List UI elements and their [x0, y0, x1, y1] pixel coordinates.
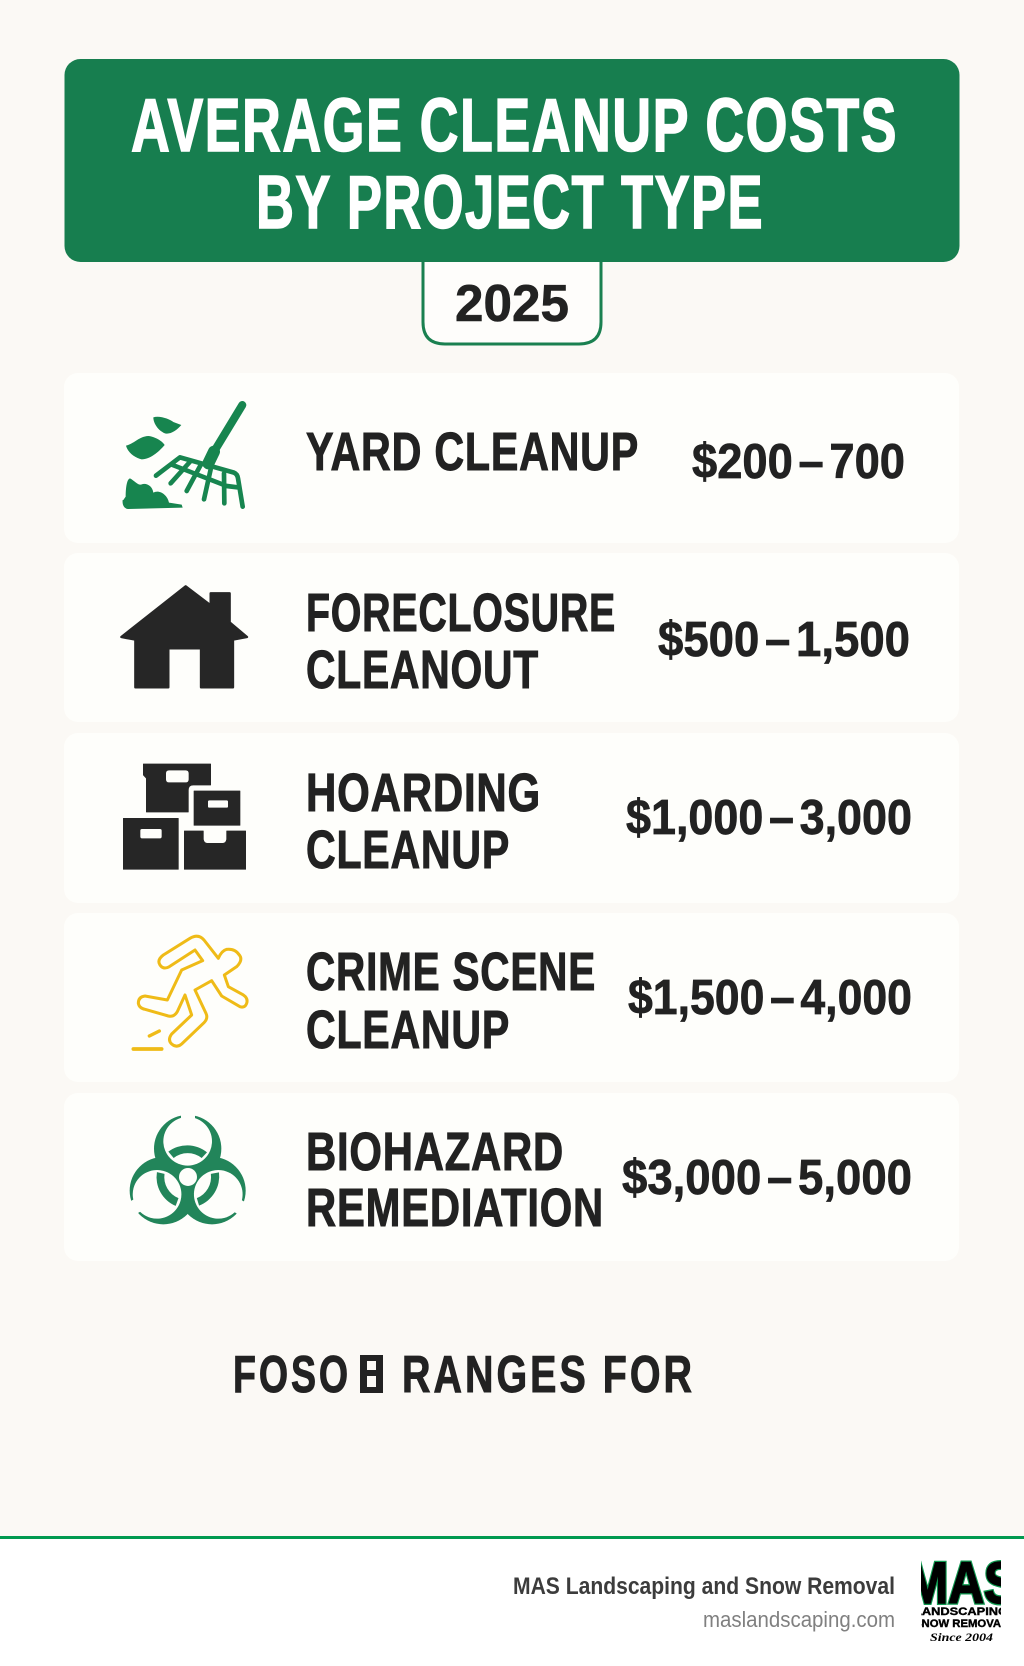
garbled subheading: FOSO — [233, 1346, 351, 1404]
card — [64, 913, 959, 1082]
card — [64, 733, 959, 903]
banner background — [64, 59, 960, 262]
label: CRIME SCENE — [306, 942, 596, 1002]
icon: rake and leaves — [123, 405, 243, 509]
company name: MAS Landscaping and Snow Removal — [513, 1573, 895, 1600]
panel: foreclosure cleanout — [64, 553, 959, 722]
price: $200 – 700 — [692, 435, 905, 489]
label: REMEDIATION — [306, 1178, 604, 1238]
year tab — [423, 262, 601, 344]
label: CLEANUP — [306, 1000, 510, 1060]
icon: body outline — [133, 936, 247, 1049]
label: CLEANOUT — [306, 640, 539, 700]
year: 2025 — [455, 275, 569, 333]
price: $500 – 1,500 — [658, 613, 910, 667]
footer background — [0, 1537, 1024, 1666]
label: BIOHAZARD — [306, 1122, 564, 1182]
footer rule — [0, 1536, 1024, 1539]
label: YARD CLEANUP — [306, 422, 639, 482]
panel: biohazard remediation — [130, 1116, 910, 1227]
label — [306, 763, 541, 880]
icon: house — [121, 586, 247, 687]
tab outline — [423, 262, 601, 344]
website: maslandscaping.com — [703, 1607, 895, 1632]
card — [64, 553, 959, 722]
logo: Since 2004 — [930, 1630, 993, 1644]
title banner — [64, 59, 960, 262]
logo — [921, 1560, 1001, 1641]
label — [306, 583, 616, 700]
card — [64, 373, 959, 543]
title line 2: BY PROJECT TYPE — [256, 160, 764, 244]
panel: yard cleanup — [64, 373, 959, 543]
garbled subheading: RANGES FOR — [402, 1346, 695, 1404]
panel: hoarding cleanup — [64, 733, 959, 903]
label — [306, 1122, 604, 1238]
label: FORECLOSURE — [306, 583, 616, 643]
label: CLEANUP — [306, 820, 510, 880]
icon: biohazard — [130, 1115, 246, 1224]
label: HOARDING — [306, 763, 541, 823]
label — [306, 942, 596, 1060]
panel: crime scene cleanup — [64, 913, 959, 1082]
garbled subheading — [233, 1346, 695, 1404]
logo: LANDSCAPING — [914, 1606, 1008, 1618]
footer — [0, 1536, 1024, 1666]
card — [64, 1093, 959, 1261]
price: $3,000 – 5,000 — [622, 1151, 912, 1205]
icon: stacked boxes — [123, 764, 246, 869]
logo: SNOW REMOVAL — [914, 1618, 1008, 1630]
price: $1,000 – 3,000 — [626, 791, 912, 845]
price: $1,500 – 4,000 — [628, 971, 912, 1025]
